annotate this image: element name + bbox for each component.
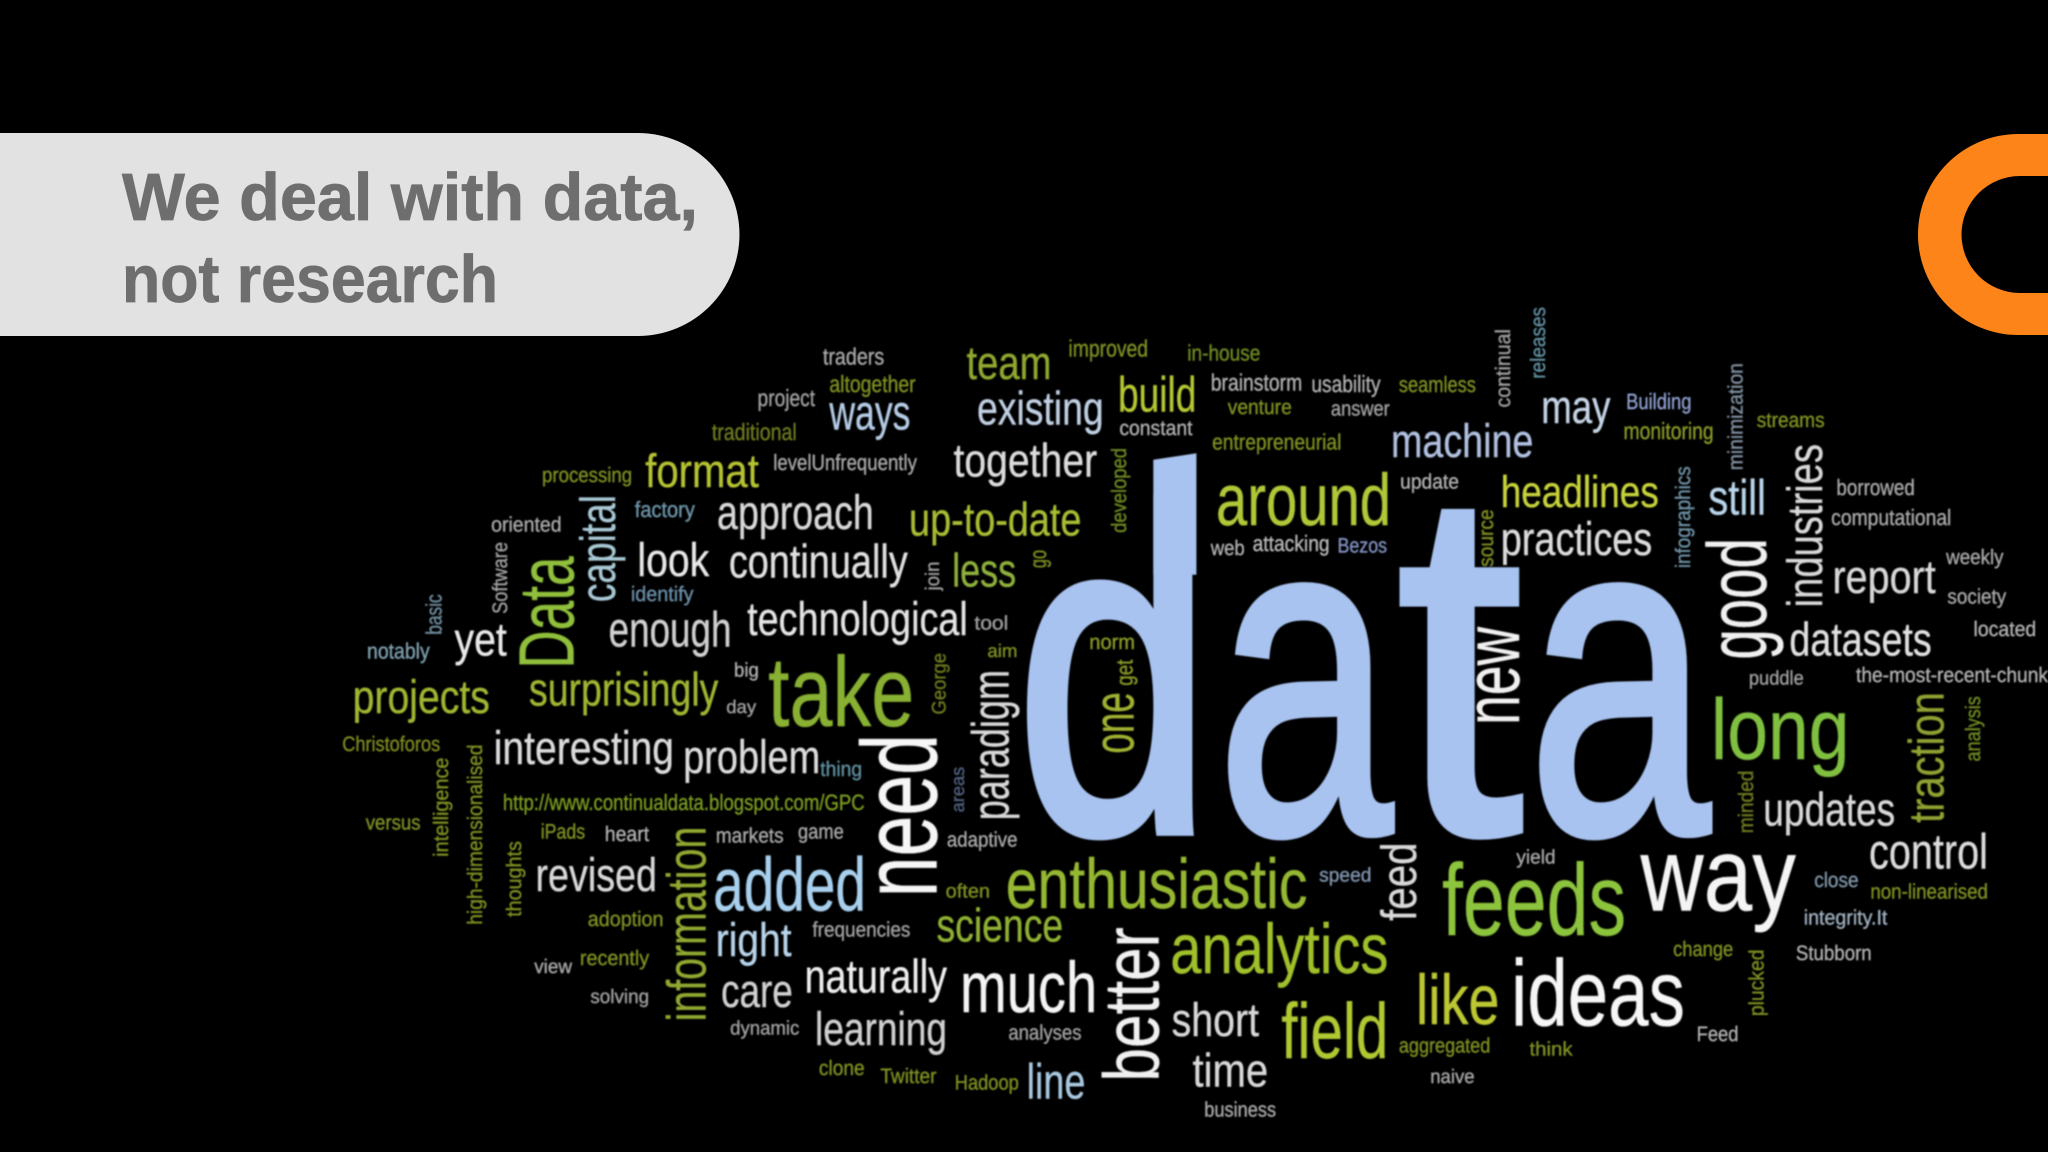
horizontal words: enough [609, 603, 731, 658]
horizontal words: computational [1831, 505, 1951, 530]
horizontal words: right [716, 913, 792, 967]
hero word: data: a [1528, 419, 1712, 930]
horizontal words: Stubborn [1796, 943, 1872, 965]
vertical words: analysis [1963, 696, 1985, 761]
horizontal words: clone [819, 1058, 865, 1080]
vertical words: intelligence [431, 757, 453, 857]
horizontal words: speed [1319, 865, 1371, 887]
horizontal words: line [1027, 1055, 1085, 1110]
hero word: data: t [1396, 387, 1524, 938]
horizontal words: practices [1501, 512, 1652, 566]
horizontal words: format [645, 444, 759, 498]
horizontal words: Christoforos [342, 734, 440, 756]
horizontal words: norm [1089, 632, 1135, 654]
horizontal words: field [1281, 987, 1388, 1075]
horizontal words: answer [1331, 398, 1390, 421]
vertical words: infographics [1673, 466, 1695, 568]
vertical words: better [1088, 927, 1176, 1081]
horizontal words: http://www.continualdata.blogspot.com/GPC [503, 790, 865, 815]
vertical words: areas [947, 767, 968, 812]
horizontal words: added [713, 842, 866, 927]
horizontal words: take [768, 637, 914, 748]
horizontal words: datasets [1789, 613, 1932, 666]
icon: orange ring [1918, 134, 2048, 335]
vertical words: feed [1373, 842, 1428, 921]
horizontal words: adaptive [947, 829, 1018, 852]
horizontal words: markets [716, 825, 784, 848]
horizontal words: naturally [805, 950, 947, 1003]
horizontal words: time [1192, 1044, 1268, 1097]
horizontal words: integrity.It [1804, 908, 1888, 930]
horizontal words: day [726, 696, 756, 717]
horizontal words: control [1869, 825, 1988, 880]
horizontal words: machine [1391, 414, 1533, 468]
horizontal words: brainstorm [1211, 370, 1302, 396]
horizontal words: yet [455, 613, 507, 666]
hero word: data: a [1217, 419, 1394, 930]
horizontal words: streams [1757, 410, 1825, 432]
horizontal words: feeds [1442, 842, 1626, 957]
vertical words: plucked [1746, 950, 1768, 1016]
horizontal words: science [936, 899, 1063, 952]
horizontal words: much [960, 947, 1097, 1028]
horizontal words: oriented [491, 515, 562, 537]
horizontal words: long [1711, 680, 1849, 777]
horizontal words: altogether [829, 371, 916, 397]
horizontal words: change [1673, 939, 1733, 961]
horizontal words: update [1400, 472, 1459, 494]
horizontal words: adoption [588, 909, 664, 931]
vertical words: Data [503, 556, 590, 669]
hero word: data [1016, 387, 1712, 938]
title: not research [122, 242, 498, 317]
horizontal words: continually [729, 534, 908, 588]
vertical words: source [1476, 509, 1498, 567]
vertical words: paradigm [963, 670, 1020, 820]
horizontal words: still [1708, 472, 1766, 526]
horizontal words: surprisingly [529, 662, 718, 716]
horizontal words: look [637, 533, 710, 586]
horizontal words: think [1529, 1038, 1573, 1061]
horizontal words: technological [747, 592, 968, 645]
horizontal words: project [758, 385, 815, 411]
vertical words: thoughts [504, 841, 526, 917]
vertical words: get [1112, 660, 1138, 686]
horizontal words: processing [542, 465, 632, 487]
vertical words: George [929, 653, 951, 714]
horizontal words: versus [366, 812, 421, 835]
horizontal words: Building [1626, 389, 1691, 414]
horizontal words: thing [820, 759, 862, 781]
horizontal words: entrepreneurial [1212, 430, 1341, 455]
vertical words: continual [1493, 329, 1515, 408]
vertical words: need [841, 734, 960, 897]
vertical words: basic [422, 594, 447, 635]
horizontal words: identify [631, 584, 694, 606]
word cloud [342, 307, 2048, 1122]
horizontal words: borrowed [1836, 475, 1915, 500]
horizontal words: yield [1516, 846, 1556, 869]
horizontal words: in-house [1187, 341, 1260, 366]
vertical words: good [1690, 538, 1784, 660]
horizontal words: projects [353, 670, 490, 724]
horizontal words: naive [1430, 1066, 1475, 1088]
horizontal words: recently [580, 948, 649, 970]
horizontal words: solving [590, 986, 649, 1008]
horizontal words: aggregated [1399, 1036, 1490, 1058]
vertical words: high-dimensionalised [465, 744, 487, 925]
horizontal words: tool [974, 613, 1008, 635]
horizontal words: monitoring [1624, 418, 1714, 444]
horizontal words: levelUnfrequently [773, 451, 917, 475]
horizontal words: less [952, 543, 1016, 597]
title: We deal with data, [122, 160, 698, 235]
horizontal words: often [946, 880, 990, 903]
horizontal words: view [534, 956, 572, 978]
horizontal words: short [1172, 993, 1259, 1046]
horizontal words: notably [367, 639, 430, 664]
vertical words: join [922, 562, 944, 592]
horizontal words: updates [1763, 782, 1895, 836]
horizontal words: traditional [712, 419, 797, 445]
vertical words: information [656, 827, 717, 1021]
horizontal words: web [1210, 538, 1245, 560]
horizontal words: factory [635, 498, 695, 522]
horizontal words: improved [1068, 336, 1148, 362]
horizontal words: business [1204, 1100, 1276, 1122]
horizontal words: Feed [1697, 1024, 1738, 1046]
vertical words: releases [1528, 307, 1550, 379]
vertical words: Software [490, 542, 512, 614]
horizontal words: Bezos [1337, 536, 1387, 558]
horizontal words: enthusiastic [1006, 845, 1307, 923]
horizontal words: up-to-date [909, 492, 1081, 546]
horizontal words: weekly [1945, 547, 2004, 569]
horizontal words: headlines [1501, 468, 1659, 517]
horizontal words: Twitter [880, 1066, 937, 1088]
panel: title pill [0, 133, 739, 336]
horizontal words: analyses [1008, 1023, 1081, 1045]
vertical words: go [1025, 550, 1051, 568]
horizontal words: located [1974, 619, 2036, 641]
horizontal words: may [1541, 380, 1610, 434]
title [122, 160, 698, 317]
hero word: data: d [1016, 418, 1212, 929]
horizontal words: problem [683, 730, 820, 784]
vertical words [422, 307, 1985, 1081]
horizontal words: constant [1119, 418, 1193, 440]
vertical words: new [1448, 626, 1536, 725]
horizontal words: society [1947, 586, 2006, 609]
vertical words: minimization [1725, 363, 1748, 470]
horizontal words: aim [987, 640, 1017, 661]
horizontal words: ways [828, 387, 910, 441]
horizontal words: non-linearised [1870, 882, 1988, 904]
vertical words: developed [1109, 448, 1131, 533]
vertical words: traction [1900, 692, 1955, 823]
horizontal words: learning [815, 1002, 947, 1055]
horizontal words: revised [536, 848, 657, 901]
horizontal words: puddle [1749, 667, 1804, 690]
horizontal words: traders [823, 344, 884, 370]
vertical words: industries [1779, 444, 1834, 607]
horizontal words: iPads [541, 822, 585, 844]
horizontal words: like [1416, 961, 1499, 1040]
horizontal words: frequencies [812, 920, 910, 942]
horizontal words [342, 336, 2048, 1122]
horizontal words: heart [605, 824, 650, 846]
vertical words: one [1083, 692, 1147, 754]
horizontal words: care [721, 964, 793, 1017]
horizontal words: approach [717, 486, 874, 539]
horizontal words: team [967, 336, 1051, 389]
horizontal words: interesting [494, 721, 674, 775]
horizontal words: game [798, 822, 844, 844]
horizontal words: together [953, 434, 1097, 487]
horizontal words: analytics [1170, 910, 1388, 989]
horizontal words: way [1639, 816, 1796, 933]
horizontal words: build [1118, 368, 1196, 423]
horizontal words: seamless [1399, 372, 1476, 397]
horizontal words: dynamic [730, 1017, 800, 1040]
horizontal words: close [1814, 870, 1859, 892]
horizontal words: around [1216, 458, 1391, 541]
horizontal words: report [1832, 550, 1936, 603]
horizontal words: ideas [1511, 942, 1685, 1046]
horizontal words: existing [977, 381, 1104, 435]
vertical words: minded [1736, 771, 1758, 833]
vertical words: capital [572, 495, 627, 602]
horizontal words: big [734, 660, 759, 682]
horizontal words: usability [1311, 371, 1381, 397]
horizontal words: venture [1228, 397, 1292, 419]
horizontal words: Hadoop [955, 1072, 1019, 1095]
horizontal words: attacking [1253, 532, 1330, 556]
